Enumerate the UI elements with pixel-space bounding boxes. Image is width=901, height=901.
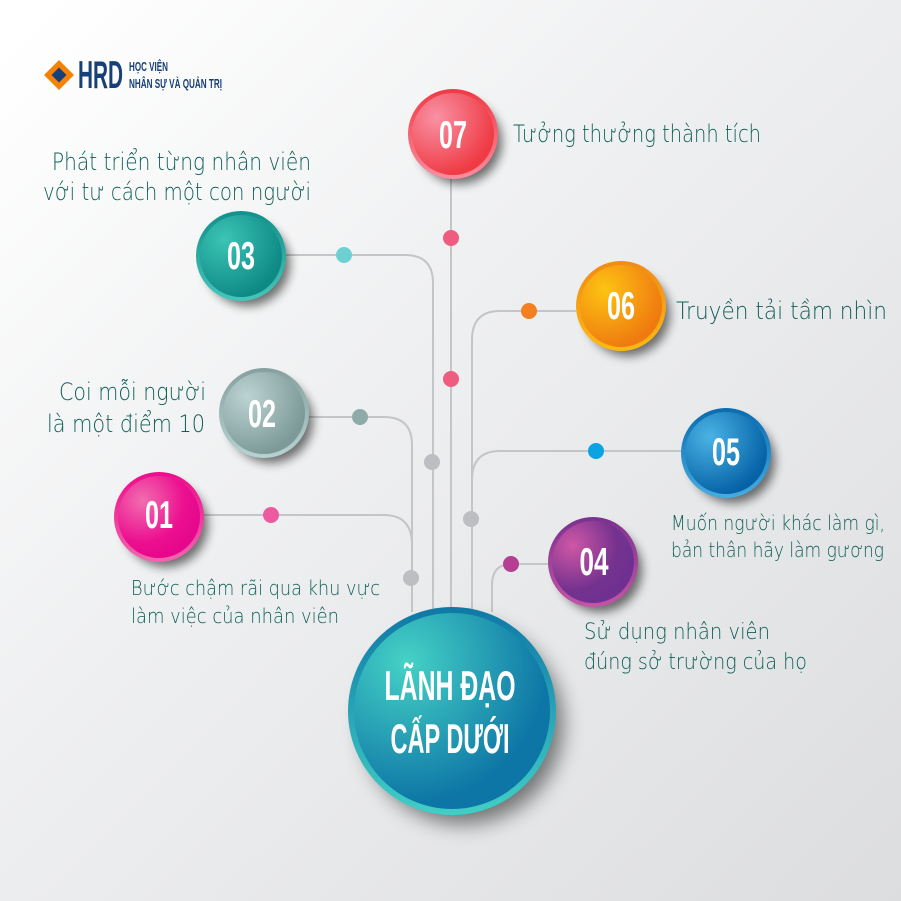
connector lines	[204, 178, 681, 612]
label 01	[131, 576, 380, 628]
logo: HỌC VIỆN	[129, 59, 168, 74]
logo: NHÂN SỰ VÀ QUẢN TRỊ	[129, 76, 222, 91]
node 01	[114, 472, 208, 567]
label 04: Sử dụng nhân viên	[584, 620, 770, 645]
node 05: 05	[712, 431, 740, 474]
label 04	[584, 620, 807, 675]
node 04	[548, 517, 642, 612]
label 03: Phát triển từng nhân viên	[52, 147, 311, 176]
node 06: 06	[607, 285, 635, 328]
logo	[44, 54, 222, 97]
node 07: 07	[439, 114, 467, 157]
node 07	[408, 89, 502, 184]
node 03	[196, 211, 290, 306]
node 03: 03	[227, 235, 255, 278]
node 05	[681, 408, 775, 503]
label 02	[47, 378, 206, 438]
label 04: đúng sở trường của họ	[584, 650, 807, 675]
label 03	[43, 147, 311, 206]
node 02: 02	[248, 393, 276, 436]
node 04: 04	[580, 541, 609, 584]
central circle: LÃNH ĐẠO	[384, 662, 516, 709]
central circle: CẤP DƯỚI	[390, 714, 510, 762]
label 02: Coi mỗi người	[59, 378, 206, 406]
connector dots	[263, 230, 604, 586]
label 07: Tưởng thưởng thành tích	[513, 120, 761, 148]
central circle	[348, 607, 563, 824]
node 06	[576, 261, 670, 356]
label 01: làm việc của nhân viên	[131, 604, 339, 628]
label 01: Bước chậm rãi qua khu vực	[131, 576, 380, 600]
label 03: với tư cách một con người	[43, 178, 311, 206]
logo: HRD	[78, 54, 123, 97]
label 05	[671, 511, 885, 562]
node 02	[219, 368, 313, 463]
node 01: 01	[145, 494, 173, 537]
label 02: là một điểm 10	[47, 409, 205, 438]
